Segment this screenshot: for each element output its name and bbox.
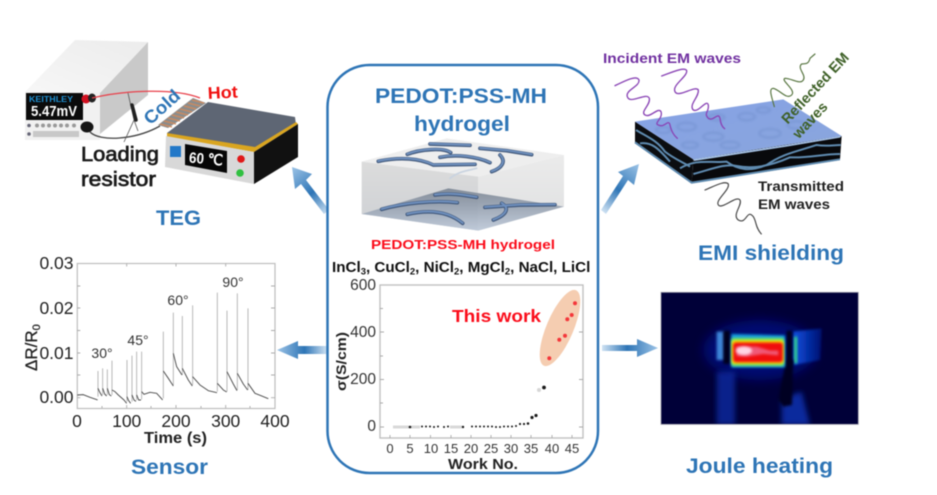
axis: x tick labels: 15: [444, 441, 458, 456]
axis: x tick labels: 40: [545, 441, 559, 456]
axis: y tick labels: [350, 277, 376, 435]
axis: x tick labels: 10: [424, 441, 438, 456]
axis: x tick labels: 25: [484, 441, 498, 456]
axis: y tick labels: 0.02: [39, 298, 74, 318]
wire: red lead: [92, 91, 200, 98]
icon: hot plate: [165, 102, 298, 184]
panel: PEDOT:PSS-MH hydrogel: [328, 65, 598, 473]
axis: x tick labels: 45: [565, 441, 579, 456]
label: 30 degrees: 30°: [91, 345, 113, 361]
axis: x tick labels: 300: [211, 411, 241, 431]
axis: y tick labels: 200: [350, 371, 376, 388]
arrow: to Sensor: [277, 341, 327, 359]
label: salt list: , NaCl, LiCl: [510, 259, 590, 276]
axis: y tick labels: 0.01: [39, 343, 74, 363]
icon: Keithley multimeter: [25, 40, 148, 140]
image: thermal map: [661, 292, 858, 425]
axis: x tick labels: 5: [406, 441, 414, 456]
heading: EMI shielding: EMI shielding: [698, 241, 844, 265]
icon: layered shielding film: [635, 99, 842, 183]
label: salt list: , CuCl: [366, 259, 410, 276]
heading: Sensor: Sensor: [131, 455, 209, 479]
label: transmitted EM waves: EM waves: [758, 196, 830, 212]
label: transmitted EM waves: Transmitted: [758, 178, 844, 194]
data: resistance trace: [77, 293, 268, 403]
axis: x tick labels: 0: [72, 411, 82, 431]
axis title: conductivity: σ(S/cm): [333, 332, 349, 391]
panel frame: [328, 65, 598, 473]
label: salt list: 3: [361, 266, 366, 278]
axis: y tick labels: 0.00: [39, 387, 74, 407]
icon: Keithley multimeter: KEITHLEY: [29, 94, 73, 104]
label: incident EM waves: Incident EM waves: [603, 51, 741, 66]
label: salt list: , NiCl: [415, 259, 454, 276]
axis: y tick labels: 400: [350, 324, 376, 341]
label: transmitted EM waves: [758, 178, 844, 212]
label: reflected EM waves: Reflected EM: [779, 50, 853, 127]
axis title: delta R over R0: 0: [31, 324, 43, 330]
axis title: time: Time (s): [144, 430, 207, 447]
data: this work points: [547, 301, 577, 360]
arrow: to Joule heating: [602, 339, 658, 357]
label: 90 degrees: 90°: [222, 274, 244, 290]
axis: x tick labels: 100: [112, 411, 142, 431]
arrow: to TEG: [292, 167, 329, 214]
label: salt list: InCl: [332, 259, 361, 276]
axis: y tick labels: 0.03: [39, 253, 74, 273]
label: red hydrogel caption: PEDOT:PSS-MH hydrogel: [371, 237, 555, 252]
chart: conductivity scatter: [333, 277, 588, 473]
icon: Keithley multimeter: 5.47mV: [31, 104, 77, 120]
label: Loading resistor: [81, 143, 159, 191]
label: Hot: Hot: [207, 82, 239, 103]
axis title: delta R over R0: ΔR/R: [22, 330, 41, 371]
data: literature points: [393, 386, 546, 428]
axis: y tick labels: [39, 253, 74, 407]
axis: x tick labels: 35: [524, 441, 538, 456]
axis: x tick labels: [386, 441, 579, 456]
heading: PEDOT:PSS-MH hydrogel: [375, 84, 547, 136]
axis: x tick labels: 400: [260, 411, 290, 431]
label: salt list: 2: [410, 266, 415, 278]
panel: Joule heating: [661, 292, 858, 478]
label: reflected EM waves: waves: [789, 99, 831, 143]
icon: hot plate: 60 ℃: [188, 150, 224, 169]
label: salt list: 2: [505, 266, 510, 278]
label: salt list: , MgCl: [459, 259, 505, 276]
heading: Joule heating: Joule heating: [686, 454, 833, 478]
label: 60 degrees: 60°: [167, 292, 189, 308]
icon: reflected wave: [771, 54, 815, 107]
label: salt list: 2: [454, 266, 459, 278]
axis: x tick labels: 30: [504, 441, 518, 456]
icon: incident waves: [615, 69, 725, 138]
axis: x tick labels: 200: [161, 411, 191, 431]
diagram: hydrogel block: [362, 138, 564, 231]
panel: EMI shielding: [603, 50, 853, 265]
label: Loading resistor: resistor: [81, 168, 156, 191]
icon: loading resistor: [124, 93, 138, 142]
label: This work: This work: [452, 306, 541, 326]
axis: y tick labels: 0: [367, 418, 376, 435]
highlight: this work ellipse: [532, 285, 588, 371]
label: 45 degrees: 45°: [127, 332, 149, 348]
axis: x tick labels: [72, 411, 290, 431]
heading: PEDOT:PSS-MH hydrogel: PEDOT:PSS-MH: [375, 84, 547, 108]
icon: transmitted wave: [705, 183, 761, 234]
panel: Sensor: [22, 253, 290, 479]
icon: thermoelectric legs: [158, 98, 206, 128]
chart: sensor response: [22, 253, 290, 447]
arrow: to EMI shielding: [601, 164, 639, 214]
axis: y tick labels: 600: [350, 277, 376, 294]
label: Cold: Cold: [140, 86, 184, 128]
label: Loading resistor: Loading: [81, 143, 159, 166]
axis title: work number: Work No.: [448, 456, 518, 473]
axis: x tick labels: 20: [464, 441, 478, 456]
axis: x tick labels: 0: [386, 441, 394, 456]
wire: black lead: [90, 126, 160, 138]
panel: TEG: [25, 40, 298, 230]
heading: PEDOT:PSS-MH hydrogel: hydrogel: [414, 112, 510, 136]
heading: TEG: TEG: [156, 206, 201, 230]
